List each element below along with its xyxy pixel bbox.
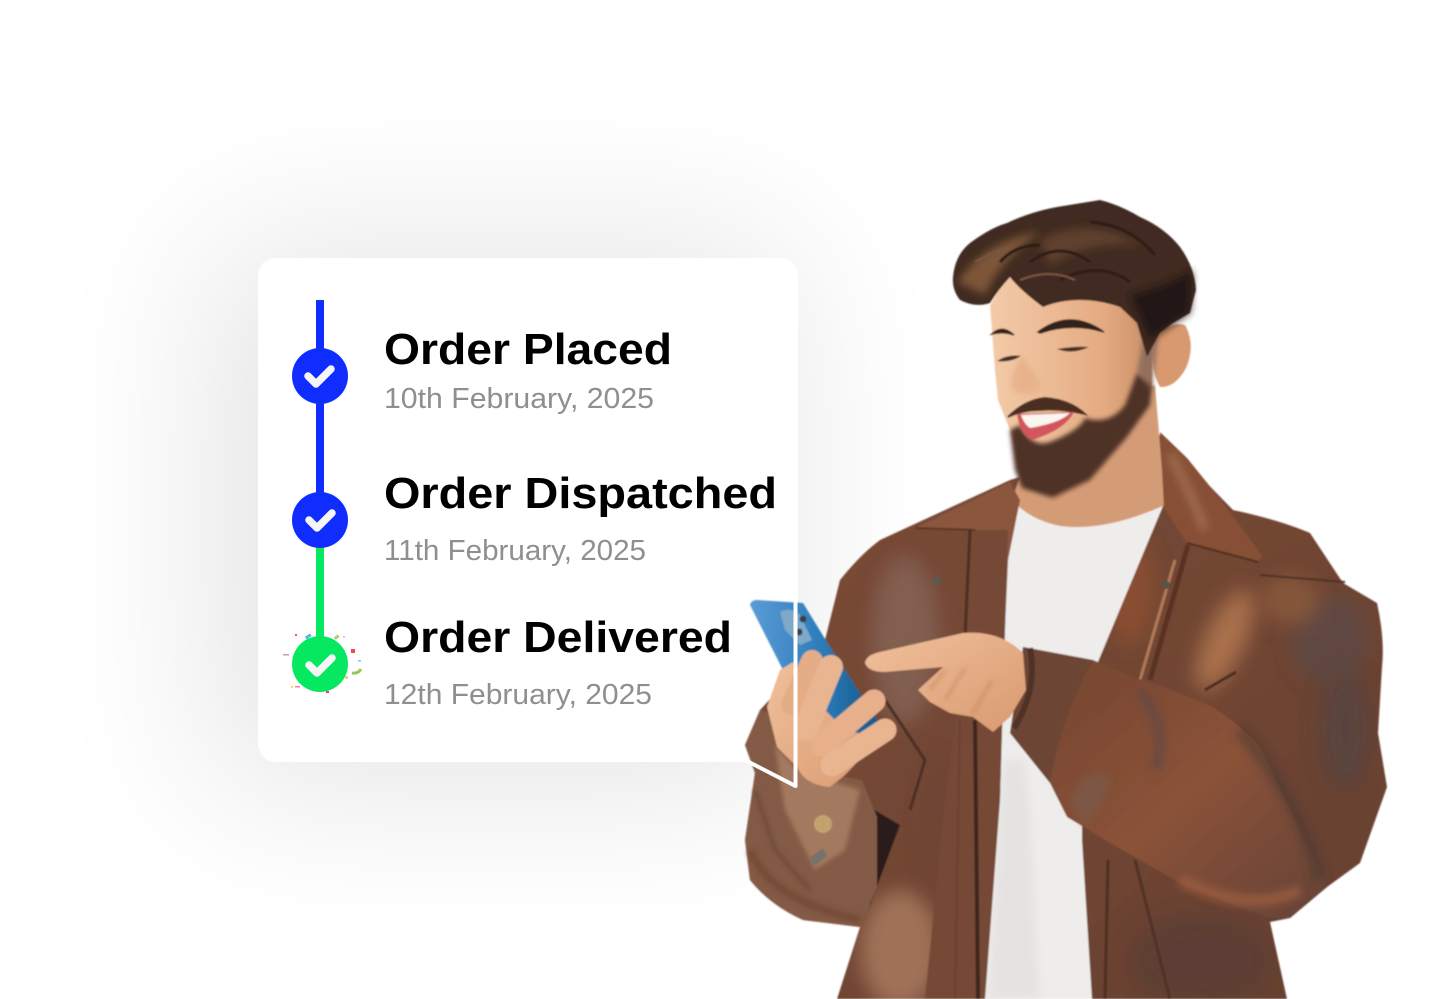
eye right: [1057, 347, 1089, 352]
hair: [953, 200, 1196, 357]
jacket left collar: [915, 482, 1020, 560]
heading: order placed: Order Placed: [384, 325, 672, 374]
person with phone: [745, 200, 1387, 999]
jacket right collar: [1160, 432, 1262, 562]
beard: [1010, 373, 1152, 498]
holding hand: [767, 661, 885, 787]
date: order placed: 10th February, 2025: [384, 383, 654, 415]
jacket left placket: [925, 530, 1008, 999]
heading: order dispatched: Order Dispatched: [384, 469, 777, 518]
neck: [1012, 385, 1165, 527]
cuff edge: [1014, 648, 1032, 728]
beard fade: [1137, 325, 1158, 390]
knuckle lines: [930, 668, 992, 715]
timeline line: blue segment: [316, 300, 324, 520]
nose shadow: [1011, 355, 1042, 394]
big sleeve: [1010, 647, 1327, 918]
white shirt: [982, 498, 1163, 999]
dark inner pocket gap: [858, 805, 900, 905]
shirt shading: [988, 760, 1040, 999]
ear: [1152, 324, 1191, 387]
timeline: [283, 300, 361, 693]
heading: order delivered: Order Delivered: [384, 613, 732, 662]
jacket seams: [885, 530, 1345, 999]
date: order delivered: 12th February, 2025: [384, 679, 652, 711]
mouth: [1017, 412, 1074, 440]
card shadow: [215, 245, 785, 785]
card edge outline over arm: [745, 600, 796, 786]
eye left: [997, 356, 1021, 361]
jacket body: [745, 435, 1387, 999]
left sleeve and cuff: [745, 710, 877, 927]
date: order dispatched: 11th February, 2025: [384, 535, 646, 567]
step marker: delivered: [292, 636, 348, 692]
timeline line: green segment: [316, 520, 324, 664]
moustache: [1008, 398, 1085, 417]
step marker: placed: [292, 348, 348, 404]
jacket buttons: [933, 577, 1170, 589]
teeth: [1021, 413, 1070, 428]
sleeve cuff: [1010, 647, 1093, 783]
face: [990, 270, 1152, 498]
panel: order tracking card: [258, 258, 798, 762]
phone: [750, 600, 882, 743]
eyebrow right: [1038, 320, 1104, 333]
eyebrow left: [992, 329, 1014, 335]
confetti burst: [283, 633, 361, 693]
pointing hand: [865, 633, 1026, 732]
step marker: dispatched: [292, 492, 348, 548]
